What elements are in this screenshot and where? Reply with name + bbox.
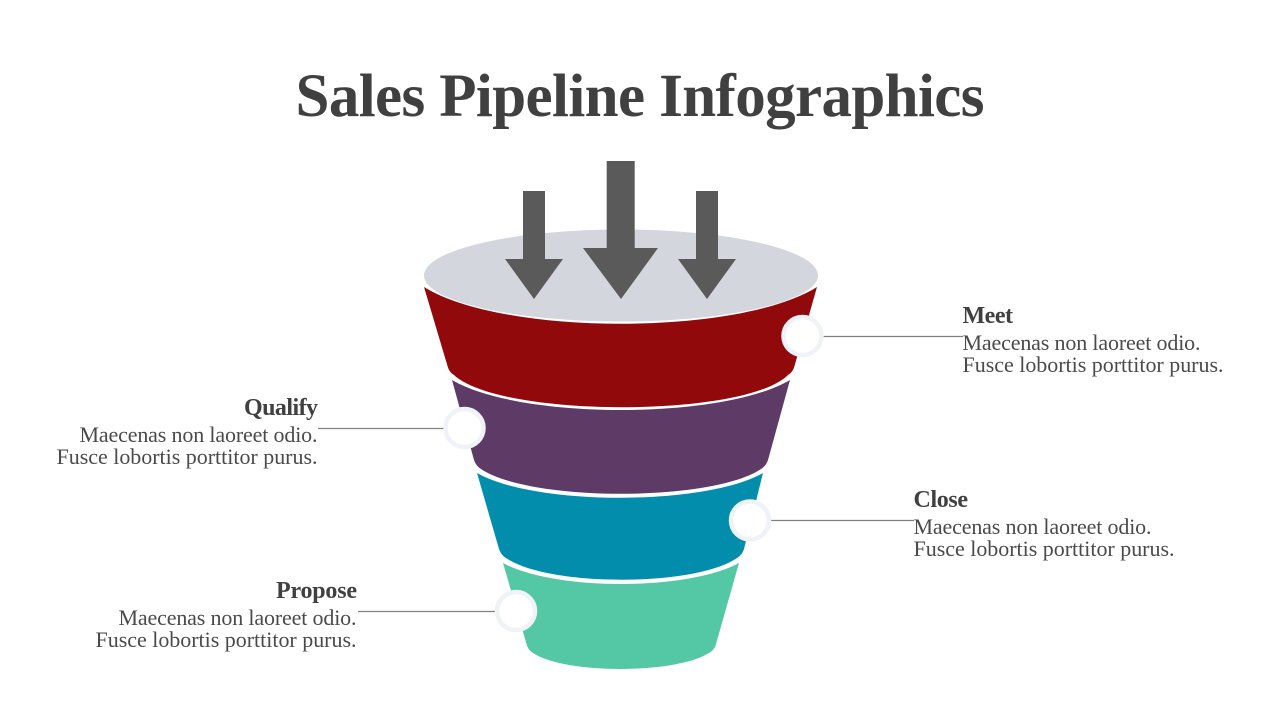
arrow: center	[583, 161, 658, 299]
arrows pointing into funnel	[505, 161, 736, 299]
connector: propose	[358, 610, 496, 612]
description: meet: Maecenas non laoreet odio.	[962, 330, 1200, 355]
description: close: Fusce lobortis porttitor purus.	[914, 536, 1174, 561]
description: propose: Fusce lobortis porttitor purus.	[96, 627, 356, 652]
heading: meet: Meet	[962, 303, 1013, 329]
heading: qualify: Qualify	[244, 395, 318, 421]
connector: qualify	[318, 428, 444, 430]
description: close: Maecenas non laoreet odio.	[914, 514, 1152, 539]
heading: close: Close	[914, 487, 968, 513]
callout: propose	[96, 578, 535, 652]
heading: propose: Propose	[276, 578, 357, 604]
marker: qualify	[446, 409, 484, 447]
funnel	[424, 230, 818, 669]
connector: close	[771, 520, 914, 522]
marker: propose	[497, 592, 535, 630]
arrow: right	[678, 191, 736, 299]
description: qualify: Maecenas non laoreet odio.	[80, 422, 318, 447]
funnel band: propose	[503, 563, 739, 669]
marker: meet	[784, 317, 822, 355]
connector: meet	[823, 336, 963, 338]
callout: close	[731, 487, 1174, 561]
marker: close	[731, 502, 769, 540]
description: qualify: Fusce lobortis porttitor purus.	[56, 444, 318, 469]
description: meet: Fusce lobortis porttitor purus.	[962, 352, 1224, 377]
funnel band: close	[477, 473, 763, 580]
funnel opening ellipse	[424, 230, 818, 322]
title: Sales Pipeline Infographics	[296, 63, 984, 130]
description: propose: Maecenas non laoreet odio.	[118, 605, 356, 630]
callout: meet	[784, 303, 1224, 377]
funnel band: meet	[424, 287, 817, 407]
funnel band: qualify	[452, 380, 790, 494]
arrow: left	[505, 191, 563, 299]
callout: qualify	[56, 395, 484, 469]
